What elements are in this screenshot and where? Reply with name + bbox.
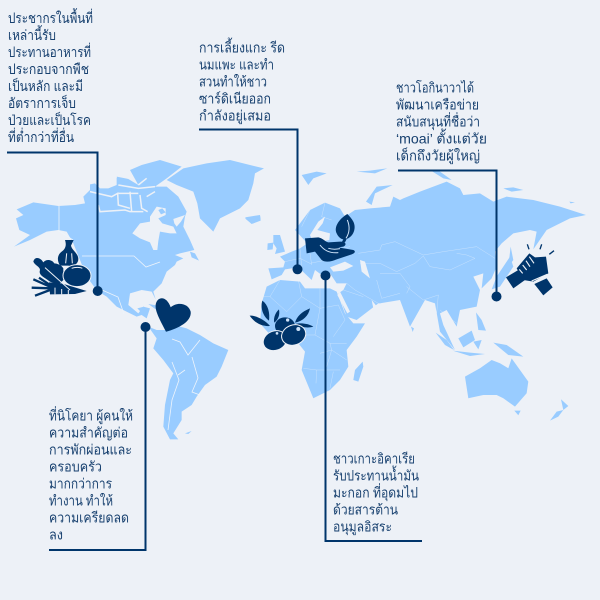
text block: Nicoya: ครอบครัว <box>49 458 102 474</box>
location dots <box>93 264 501 332</box>
text block: Nicoya: ลง <box>49 526 63 542</box>
world map <box>14 160 586 439</box>
text block: plant-based diet: ป่วยและเป็นโรค <box>8 111 91 128</box>
text block: plant-based diet: อัตราการเจ็บ <box>8 94 76 111</box>
icon: raised fist <box>506 244 554 295</box>
text block: Sardinia: การเลี้ยงแกะ รีด <box>199 38 285 56</box>
text block: plant-based diet: ประชากรในพื้นที่ <box>8 8 93 26</box>
text block: plant-based diet: เหล่านี้รับ <box>8 25 56 43</box>
text block: Ikaria <box>333 450 419 536</box>
text block: plant-based diet: เป็นหลัก และมี <box>8 77 83 94</box>
text block: Nicoya <box>49 406 133 542</box>
text block: Nicoya: ทำงาน ทำให้ <box>49 492 113 508</box>
text block: Okinawa: เด็กถึงวัยผู้ใหญ่ <box>396 146 480 164</box>
text block: Ikaria: รับประทานน้ำมัน <box>333 466 419 484</box>
text block: Ikaria: มะกอก ที่อุดมไป <box>333 484 418 502</box>
text block: Nicoya: ความสำคัญต่อ <box>49 424 128 440</box>
icon: vegetables <box>32 240 91 296</box>
text block: Okinawa: พัฒนาเครือข่าย <box>396 96 479 112</box>
text block: Sardinia <box>199 38 285 124</box>
text block: Sardinia: กำลังอยู่เสมอ <box>199 108 271 124</box>
text block: Ikaria: ด้วยสารต้าน <box>333 502 398 518</box>
text block: plant-based diet <box>8 8 93 145</box>
text block: Ikaria: ชาวเกาะอิคาเรีย <box>333 450 415 466</box>
icon: heart <box>156 298 191 332</box>
text block: plant-based diet: ประทานอาหารที่ <box>8 43 91 60</box>
text block: Nicoya: ความเครียดลด <box>49 510 129 526</box>
text block: Sardinia: นมแพะ และทำ <box>199 56 274 72</box>
text block: Ikaria: อนุมูลอิสระ <box>333 518 392 536</box>
text block: Nicoya: การพักผ่อนและ <box>49 442 132 458</box>
text block: Okinawa: ‘moai’ ตั้งแต่วัย <box>396 128 487 146</box>
icon: hand with plant <box>305 214 355 262</box>
text block: Sardinia: ซาร์ดิเนียออก <box>199 90 271 106</box>
text block: plant-based diet: ประกอบจากพืช <box>8 61 89 77</box>
connector lines <box>7 130 496 550</box>
text block: Sardinia: สวนทำให้ชาว <box>199 74 267 90</box>
text block: Okinawa <box>396 80 487 164</box>
text block: Okinawa: ชาวโอกินาวาได้ <box>396 80 474 96</box>
text block: Okinawa: สนับสนุนที่ชื่อว่า <box>396 112 480 130</box>
icon: olives <box>250 301 313 354</box>
text block: Nicoya: ที่นิโคยา ผู้คนให้ <box>49 406 133 424</box>
text block: Nicoya: มากกว่าการ <box>49 476 112 492</box>
text block: plant-based diet: ที่ต่ำกว่าที่อื่น <box>8 128 74 145</box>
